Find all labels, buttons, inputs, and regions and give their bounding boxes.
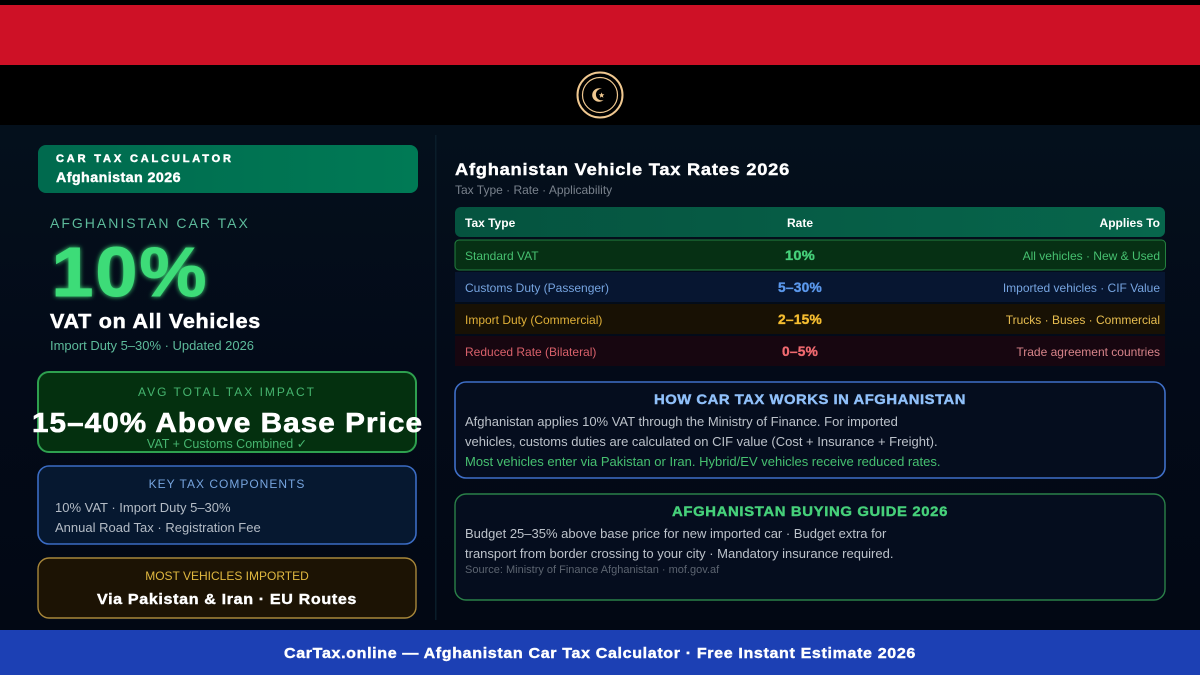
table header row: Tax Type [465,216,516,230]
row: import duty: Import Duty (Commercial) [465,313,602,327]
panel: buying guide: AFGHANISTAN BUYING GUIDE 2026 [672,503,948,519]
icon: crescent and star emblem [578,72,622,118]
row: customs duty: Customs Duty (Passenger) [465,281,609,295]
row: standard VAT: 10% [785,248,815,263]
panel: buying guide: transport from border crossing to your city · Mandatory insurance required. [465,546,893,561]
footer bar: CarTax.online — Afghanistan Car Tax Calculator · Free Instant Estimate 2026 [284,645,916,662]
row: standard VAT [455,240,1166,270]
flag band: black top stripe [0,0,1200,5]
row: reduced rate [455,336,1165,366]
panel: average total tax impact [32,372,423,452]
flag band: red stripe [0,5,1200,65]
big rate: 10%: 10% [52,233,208,311]
row: customs duty: 5–30% [778,280,822,295]
panel: buying guide: Source: Ministry of Finance Afghanistan · mof.gov.af [465,564,720,576]
row: import duty: Trucks · Buses · Commercial [1006,313,1160,327]
panel: calculator badge: CAR TAX CALCULATOR [56,153,231,165]
panel: calculator badge: Afghanistan 2026 [56,170,181,185]
footer bar [0,630,1200,675]
table header row: Applies To [1100,216,1160,230]
panel: how car tax works [455,382,1165,478]
heading: Afghanistan car tax: AFGHANISTAN CAR TAX [50,215,250,231]
panel: key tax components: KEY TAX COMPONENTS [149,477,305,491]
panel: average total tax impact: 15–40% Above Base Price [32,407,423,438]
row: customs duty: Imported vehicles · CIF Value [1003,281,1160,295]
page background [0,125,1200,630]
table: vehicle tax rates [455,207,1166,366]
panel: most vehicles imported [38,558,416,618]
row: reduced rate: 0–5% [782,344,818,359]
panel: most vehicles imported: MOST VEHICLES IMPORTED [145,569,309,583]
table subheading: Tax Type · Rate · Applicability [455,183,612,197]
panel: average total tax impact: AVG TOTAL TAX IMPACT [138,385,316,399]
panel: how car tax works: Afghanistan applies 10% VAT through the Ministry of Finance. For imported [465,414,898,429]
column divider [435,135,436,620]
table header row: Rate [787,216,813,230]
panel: key tax components [38,466,416,544]
panel: buying guide: Budget 25–35% above base price for new imported car · Budget extra for [465,526,887,541]
panel: how car tax works: vehicles, customs duties are calculated on CIF value (Cost + Insurance + Freight). [465,434,938,449]
panel: calculator badge [38,145,418,193]
text: import duty note: Import Duty 5–30% · Updated 2026 [50,338,254,353]
subheading: VAT on all vehicles: VAT on All Vehicles [50,311,261,333]
flag band: black stripe [0,65,1200,125]
panel: most vehicles imported: Via Pakistan & Iran · EU Routes [97,591,357,608]
table header row [455,207,1165,237]
row: reduced rate: Trade agreement countries [1016,345,1160,359]
panel: key tax components: 10% VAT · Import Duty 5–30% [55,500,231,515]
table heading: Afghanistan Vehicle Tax Rates 2026 [455,160,790,179]
row: customs duty [455,272,1165,302]
row: reduced rate: Reduced Rate (Bilateral) [465,345,596,359]
panel: how car tax works: Most vehicles enter via Pakistan or Iran. Hybrid/EV vehicles receive reduced rates. [465,454,940,469]
panel: average total tax impact: VAT + Customs Combined ✓ [147,437,307,451]
row: standard VAT: All vehicles · New & Used [1023,249,1160,263]
panel: key tax components: Annual Road Tax · Registration Fee [55,520,261,535]
panel: buying guide [455,494,1165,600]
row: import duty: 2–15% [778,312,822,327]
row: standard VAT: Standard VAT [465,249,539,263]
panel: how car tax works: HOW CAR TAX WORKS IN AFGHANISTAN [654,391,966,407]
row: import duty [455,304,1165,334]
